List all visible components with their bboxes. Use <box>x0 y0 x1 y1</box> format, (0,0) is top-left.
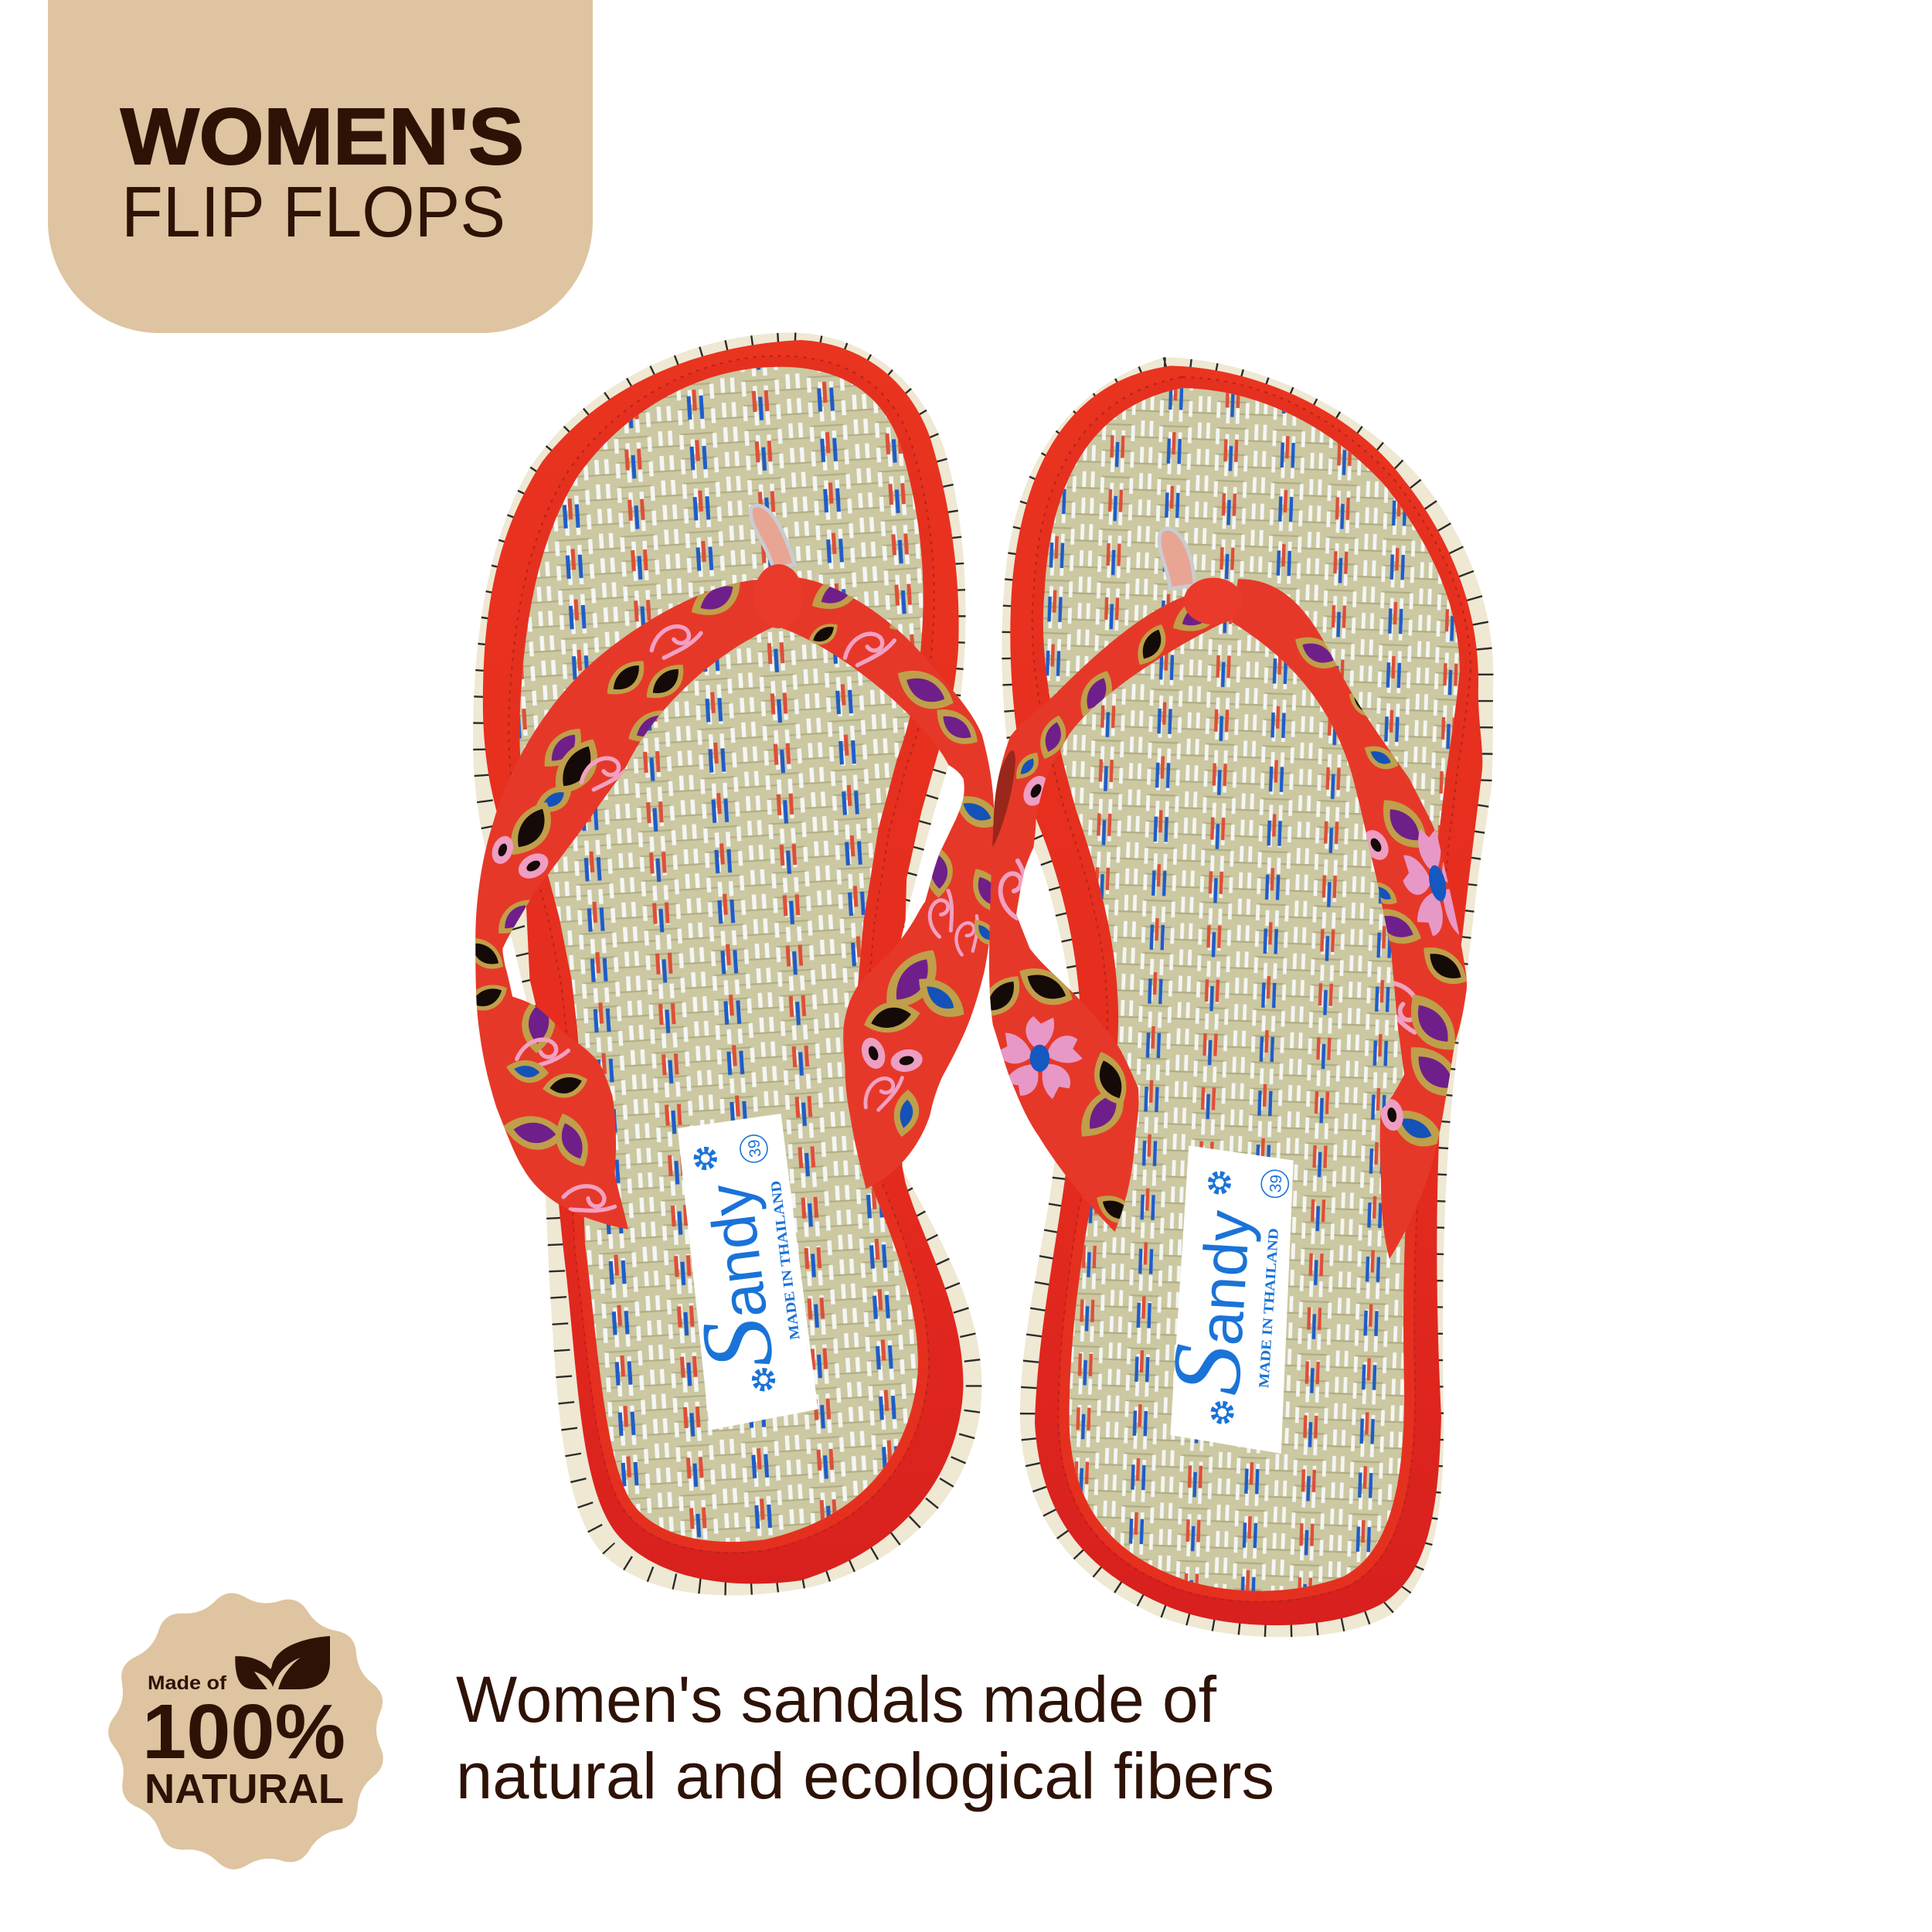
left brand label: 39 <box>745 1138 765 1158</box>
left sole <box>473 332 981 1595</box>
text: made of: Made of <box>148 1672 227 1694</box>
right red binding <box>1010 366 1482 1625</box>
heading: flip flops: FLIP FLOPS <box>121 172 505 252</box>
text: natural: NATURAL <box>145 1766 344 1812</box>
description text: Women's sandals made of <box>456 1663 1217 1736</box>
right brand label: MADE IN THAILAND <box>1256 1228 1281 1389</box>
left sandal <box>464 332 1005 1595</box>
icon: leaves <box>235 1636 330 1689</box>
scalloped seal <box>108 1593 383 1869</box>
right strap, outer side <box>1189 579 1484 1259</box>
description text: natural and ecological fibers <box>456 1740 1274 1812</box>
text: 100%: 100% <box>142 1689 345 1775</box>
left toe post <box>750 505 794 569</box>
left brand label <box>658 1114 818 1430</box>
title panel <box>48 0 593 333</box>
right strap knot <box>1184 578 1243 624</box>
right woven mat <box>1043 388 1460 1591</box>
description text <box>456 1663 1274 1812</box>
photo: pair of woven flip flops <box>464 332 1493 1637</box>
left strap, outer side <box>464 579 776 1230</box>
left red binding <box>483 340 964 1583</box>
right brand label <box>1148 1145 1294 1454</box>
left woven mat <box>519 367 923 1542</box>
right strap, inner side <box>989 597 1223 1232</box>
left brand label: Sandy <box>663 1179 794 1376</box>
right brand label: 39 <box>1267 1174 1285 1193</box>
left brand label: MADE IN THAILAND <box>767 1180 803 1341</box>
left strap, inner side <box>782 574 1005 1189</box>
right sandal <box>973 357 1493 1637</box>
left strap knot <box>754 564 803 628</box>
badge: made of 100% natural <box>108 1593 383 1869</box>
right brand label: Sandy <box>1150 1206 1271 1398</box>
heading: women's: WOMEN'S <box>121 92 524 181</box>
right toe post <box>1159 529 1195 589</box>
right sole <box>1002 357 1493 1637</box>
